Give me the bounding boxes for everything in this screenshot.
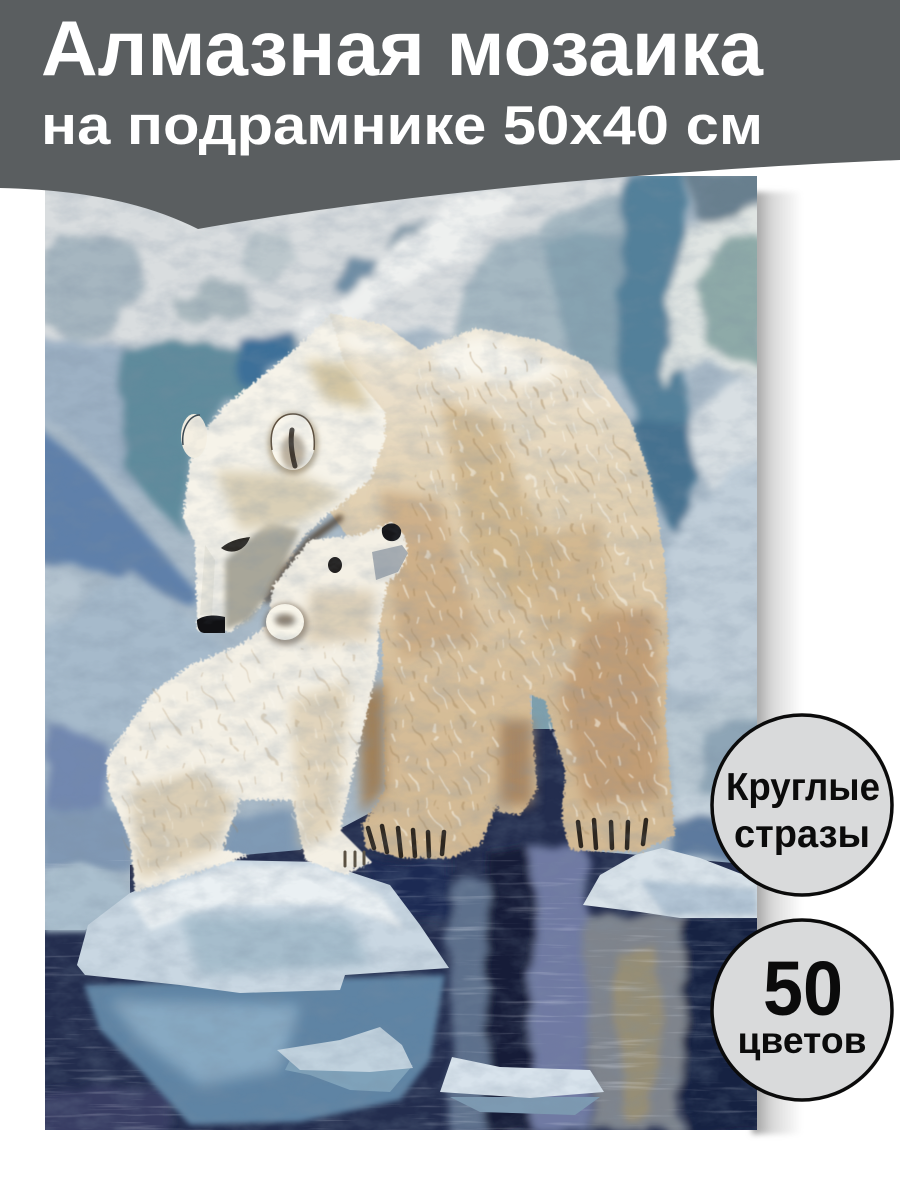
badge: 50 colours: цветов [738,1020,866,1061]
water with reflections [40,695,764,1140]
painting: polar bears on ice [30,170,770,1140]
background: ice cliffs [45,176,757,930]
right floe [583,848,757,918]
ear right [268,413,318,475]
eye [221,537,250,552]
ear left [181,414,207,458]
ice floes [45,848,757,1125]
neck shadow [268,518,340,600]
cub claws [345,852,364,866]
head [181,315,385,633]
small front floe [440,1057,604,1115]
large floe [77,860,449,993]
cub fur shading [130,590,375,880]
water ripples [45,860,757,1130]
badge: round rhinestones: стразы [734,813,870,856]
cub eye [328,557,342,573]
header banner [0,0,900,229]
polar bear cub [106,522,408,892]
cub muzzle [372,545,408,580]
cub nose [382,523,401,541]
cub ear [264,603,308,645]
small floe [277,1027,413,1092]
badge: round rhinestones: Круглые [726,766,880,809]
canvas side shadow [752,192,802,1134]
left floe [45,862,132,932]
fur flecks [378,340,665,845]
badge: 50 colours: 50 [763,946,843,1032]
watercolor mottling [45,176,757,1130]
badge: round rhinestones [712,715,892,895]
nose [197,615,225,633]
body [300,313,675,858]
front paw claws [368,820,646,856]
reflection of the large floe [84,975,445,1125]
cub fur flecks [110,640,370,885]
mother polar bear [181,313,675,858]
title: Алмазная мозаика [41,4,764,92]
fur shading [330,330,660,815]
badge: 50 colours [712,920,892,1100]
subtitle: на подрамнике 50x40 см [41,94,763,156]
